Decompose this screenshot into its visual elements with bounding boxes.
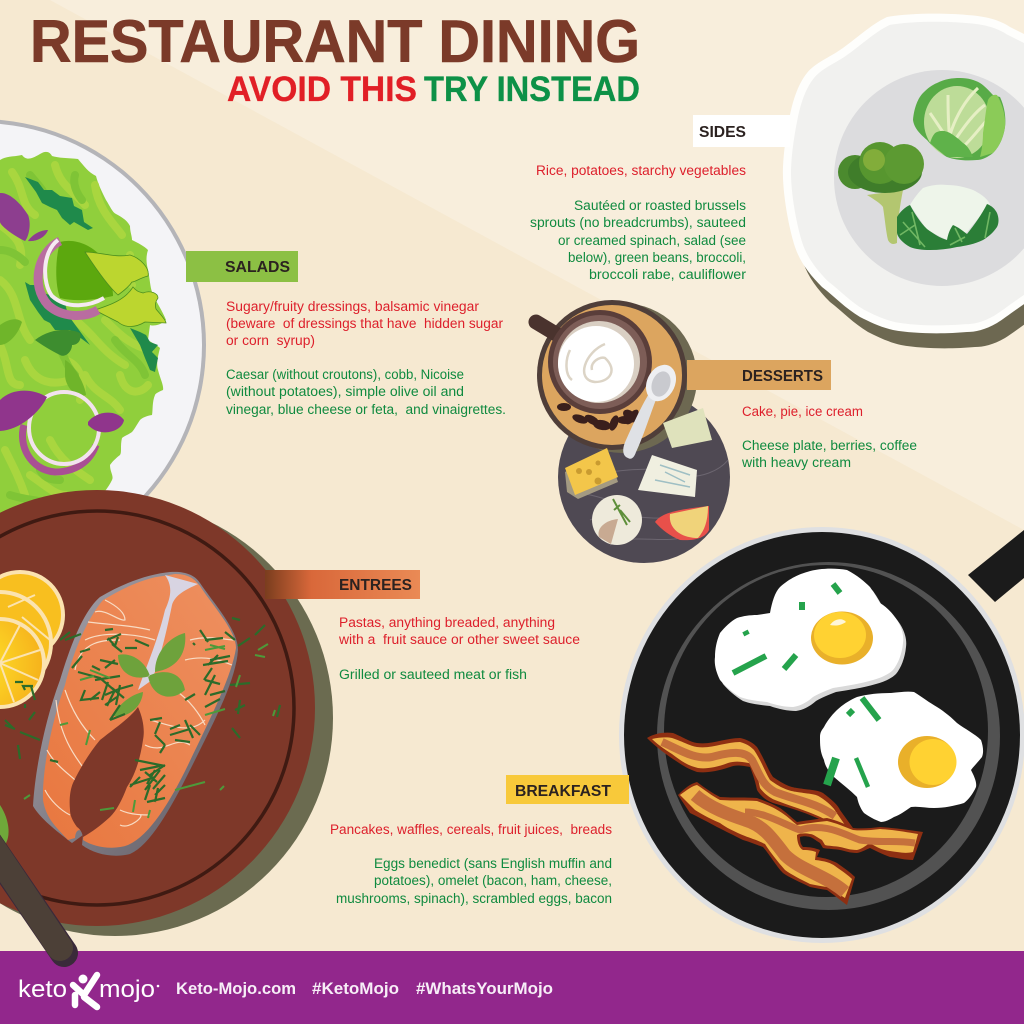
- subtitle: try instead: TRY INSTEAD: [424, 70, 640, 109]
- bacon: [647, 733, 923, 905]
- text block: sides: Sautéed or roasted brussels: [574, 198, 746, 213]
- text block: desserts: Cake, pie, ice cream: [742, 404, 863, 419]
- pan: [619, 527, 1024, 943]
- text block: salads: or corn syrup): [226, 333, 315, 348]
- label: sides: SIDES: [699, 124, 746, 141]
- text block: salads: [226, 299, 506, 417]
- plate shadow: [791, 29, 1024, 348]
- text block: sides: or creamed spinach, salad (see: [558, 233, 746, 248]
- cheese: gorgonzola: [638, 455, 697, 497]
- label: breakfast: BREAKFAST: [515, 783, 612, 800]
- label: entrees: [265, 570, 420, 599]
- text block: sides: [530, 163, 747, 282]
- lemons: [0, 570, 65, 709]
- text block: salads: vinegar, blue cheese or feta, and vinaigrettes.: [226, 402, 506, 417]
- rocket leaves: [25, 177, 93, 230]
- text block: sides: Rice, potatoes, starchy vegetables: [536, 163, 746, 178]
- logo: keto mojo: keto: [18, 976, 67, 1003]
- yellow leaves: [85, 252, 166, 326]
- panel: entrees illustration: [0, 490, 333, 936]
- yolk: [811, 612, 873, 664]
- steak centre hollow: [70, 707, 144, 837]
- cheese: brie: [592, 495, 642, 545]
- salmon steak: [5, 572, 280, 856]
- panel: breakfast illustration: [619, 527, 1024, 943]
- board: [0, 490, 315, 926]
- text block: breakfast: mushrooms, spinach), scrambled eggs, bacon: [336, 891, 612, 906]
- subtitle: avoid this: AVOID THIS: [227, 70, 417, 109]
- cup: [548, 310, 652, 414]
- chives: [733, 584, 840, 673]
- text block: desserts: [741, 404, 917, 470]
- lettuce streaks: [0, 165, 150, 495]
- text block: salads: Sugary/fruity dressings, balsamic vinegar: [226, 299, 480, 314]
- label: salads: SALADS: [225, 259, 290, 276]
- board shadow: [0, 500, 333, 936]
- text block: breakfast: [330, 822, 612, 906]
- bacon strip two: [678, 782, 923, 905]
- dill: [5, 618, 280, 802]
- slate cheese board: [558, 391, 730, 563]
- label: sides: [693, 115, 790, 147]
- plate: [0, 119, 206, 571]
- label: salads: [186, 251, 298, 282]
- title: [30, 8, 640, 109]
- pan handle: [968, 530, 1024, 602]
- logo: keto mojo: [18, 974, 159, 1007]
- icon: cabbage: [913, 78, 1005, 160]
- bacon strip one: [647, 733, 853, 828]
- egg two: [820, 692, 983, 822]
- label: breakfast: [506, 775, 629, 804]
- cup handle: [536, 322, 556, 334]
- text block: entrees: Grilled or sauteed meat or fish: [339, 667, 527, 682]
- onion ring top: [38, 240, 104, 315]
- coffee beans: [557, 403, 641, 432]
- text block: sides: below), green beans, broccoli,: [568, 250, 746, 265]
- plate: [783, 14, 1024, 333]
- cheese: gouda wedge: [655, 506, 709, 540]
- footer link: website: Keto-Mojo.com: [176, 979, 296, 998]
- logo: keto mojo: mojo: [99, 976, 155, 1003]
- footer link: hashtag two: #WhatsYourMojo: [416, 979, 553, 998]
- icon: cauliflower: [897, 185, 998, 250]
- text block: salads: Caesar (without croutons), cobb, Nicoise: [226, 367, 464, 382]
- spoon: [623, 360, 682, 459]
- saucer shadow: [547, 303, 697, 453]
- panel: sides illustration: [783, 14, 1024, 348]
- panel: salad illustration: [0, 119, 206, 571]
- text block: breakfast: Pancakes, waffles, cereals, fruit juices, breads: [330, 822, 612, 837]
- text block: salads: (beware of dressings that have hidden sugar: [226, 316, 504, 331]
- onion ring bottom: [22, 392, 99, 472]
- text block: breakfast: Eggs benedict (sans English muffin and: [374, 856, 612, 871]
- text block: entrees: Pastas, anything breaded, anything: [339, 615, 555, 630]
- cheese: blue wedge: [663, 408, 712, 448]
- label: entrees: ENTREES: [339, 577, 412, 594]
- title: RESTAURANT DINING: [30, 8, 640, 75]
- basil leaves: [0, 193, 30, 241]
- text block: desserts: Cheese plate, berries, coffee: [742, 438, 917, 453]
- text block: entrees: [338, 615, 580, 682]
- label: desserts: DESSERTS: [742, 368, 823, 385]
- chives: [827, 758, 836, 785]
- yolk: [898, 736, 956, 788]
- cheese: swiss: [565, 448, 618, 499]
- label: desserts: [687, 360, 831, 390]
- text block: sides: sprouts (no breadcrumbs), sauteed: [530, 215, 746, 230]
- knife handle: [0, 832, 64, 953]
- text block: salads: (without potatoes), simple olive oil and: [226, 384, 464, 399]
- lettuce: [0, 152, 166, 515]
- text block: desserts: with heavy cream: [741, 455, 851, 470]
- saucer: [537, 300, 687, 450]
- egg one: [715, 569, 906, 711]
- text block: sides: broccoli rabe, cauliflower: [589, 267, 747, 282]
- text block: breakfast: potatoes), omelet (bacon, ham, cheese,: [374, 873, 612, 888]
- footer bar: [0, 951, 1024, 1024]
- footer link: hashtag one: #KetoMojo: [312, 979, 399, 998]
- panel: desserts illustration: [536, 300, 730, 563]
- text block: entrees: with a fruit sauce or other sweet sauce: [338, 632, 580, 647]
- herb leaves: [113, 633, 185, 716]
- herb leaf: [0, 805, 9, 848]
- icon: broccoli: [838, 142, 924, 244]
